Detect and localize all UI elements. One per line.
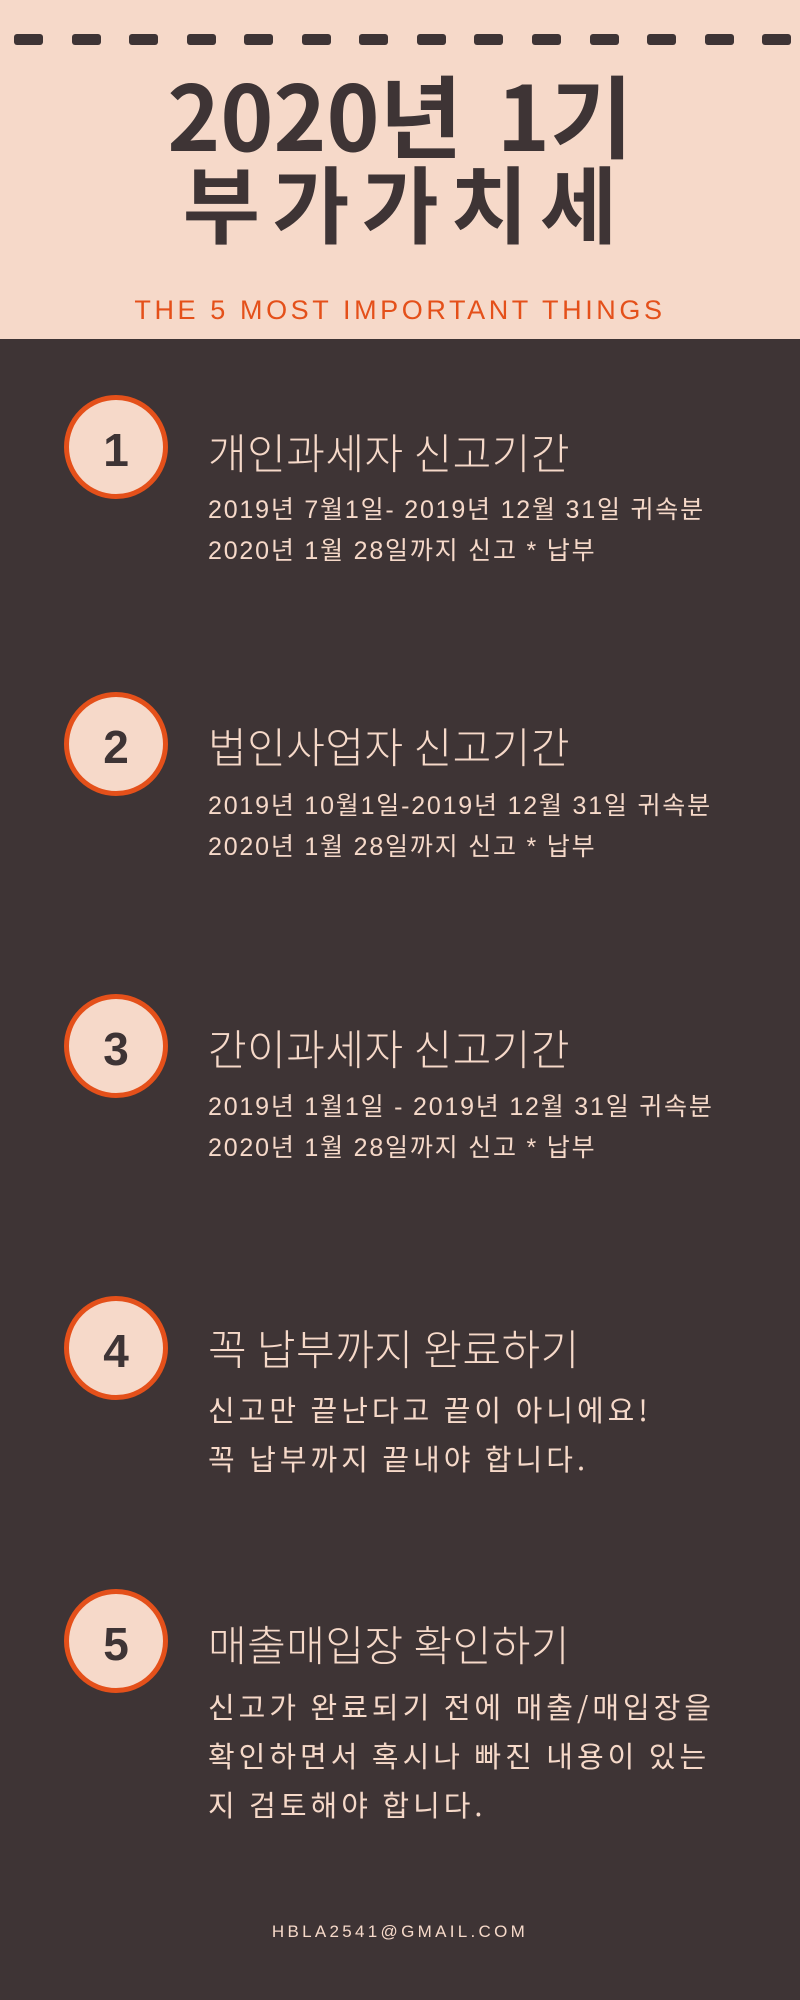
- text: 2: [103, 721, 129, 773]
- item 2: [64, 692, 712, 861]
- text: 2019년 10월1일-2019년 12월 31일 귀속분: [208, 792, 712, 820]
- text: 매출매입장 확인하기: [208, 1613, 570, 1674]
- text: 3: [103, 1023, 129, 1075]
- text: 간이과세자 신고기간: [208, 1017, 570, 1078]
- text: 4: [103, 1325, 129, 1377]
- text: 꼭 납부까지 끝내야 합니다.: [208, 1437, 589, 1479]
- text: 신고가 완료되기 전에 매출/매입장을: [208, 1685, 715, 1727]
- text: 5: [103, 1618, 129, 1670]
- title: 2020년 1기: [167, 47, 633, 177]
- text: 1: [103, 424, 129, 476]
- text: 확인하면서 혹시나 빠진 내용이 있는: [208, 1734, 710, 1776]
- item 1: [64, 395, 705, 565]
- text: 법인사업자 신고기간: [208, 715, 570, 776]
- subtitle: THE 5 MOST IMPORTANT THINGS: [134, 295, 666, 325]
- text: 2019년 1월1일 - 2019년 12월 31일 귀속분: [208, 1093, 714, 1121]
- item 5: [64, 1589, 715, 1825]
- footer email: HBLA2541@GMAIL.COM: [272, 1922, 528, 1941]
- text: 2019년 7월1일- 2019년 12월 31일 귀속분: [208, 496, 705, 524]
- text: 개인과세자 신고기간: [208, 421, 570, 482]
- text: 꼭 납부까지 완료하기: [208, 1317, 580, 1378]
- text: 2020년 1월 28일까지 신고 * 납부: [208, 1134, 596, 1162]
- header panel: [0, 0, 800, 339]
- text: 신고만 끝난다고 끝이 아니에요!: [208, 1388, 652, 1430]
- item 3: [64, 994, 714, 1162]
- text: 2020년 1월 28일까지 신고 * 납부: [208, 833, 596, 861]
- text: 2020년 1월 28일까지 신고 * 납부: [208, 537, 596, 565]
- text: 지 검토해야 합니다.: [208, 1783, 486, 1825]
- item 4: [64, 1296, 652, 1479]
- title line 2: 부가가치세: [183, 141, 629, 262]
